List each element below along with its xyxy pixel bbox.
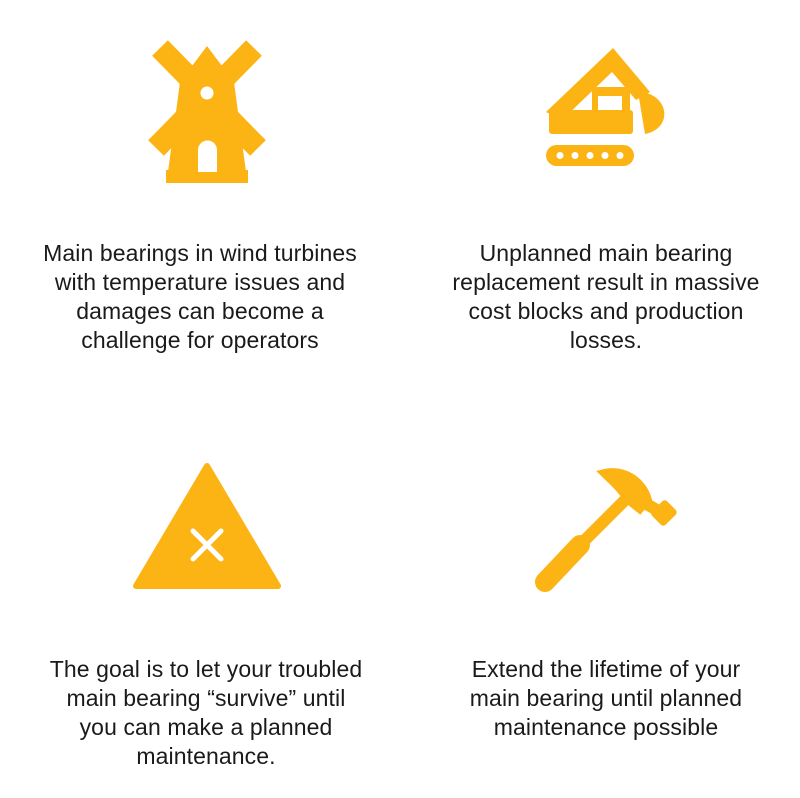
text: goal: main bearing “survive” until [67, 685, 345, 711]
text: wind turbines: damages can become a [76, 298, 324, 324]
text: unplanned replacement: cost blocks and production [469, 298, 743, 324]
text: unplanned replacement: replacement result in massive [452, 269, 760, 295]
icon: warning triangle [136, 466, 278, 586]
text: goal: The goal is to let your troubled [50, 656, 362, 682]
text: wind turbines: challenge for operators [81, 327, 319, 353]
text: goal: maintenance. [136, 743, 276, 769]
icon: excavator [546, 48, 664, 166]
text: unplanned replacement: Unplanned main bearing [480, 240, 732, 266]
icon: windmill [156, 46, 258, 183]
text: unplanned replacement: losses. [570, 327, 642, 353]
text: unplanned replacement [452, 240, 760, 353]
text: extend lifetime: Extend the lifetime of your [472, 656, 740, 682]
text: wind turbines: with temperature issues and [55, 269, 345, 295]
text: wind turbines: Main bearings in wind turbines [43, 240, 357, 266]
icon: hammer [545, 470, 677, 582]
text: extend lifetime: main bearing until planned [470, 685, 742, 711]
text: goal: you can make a planned [80, 714, 332, 740]
text: extend lifetime: maintenance possible [494, 714, 718, 740]
text: goal [50, 656, 362, 769]
text: extend lifetime [470, 656, 742, 740]
text: wind turbines [43, 240, 357, 353]
